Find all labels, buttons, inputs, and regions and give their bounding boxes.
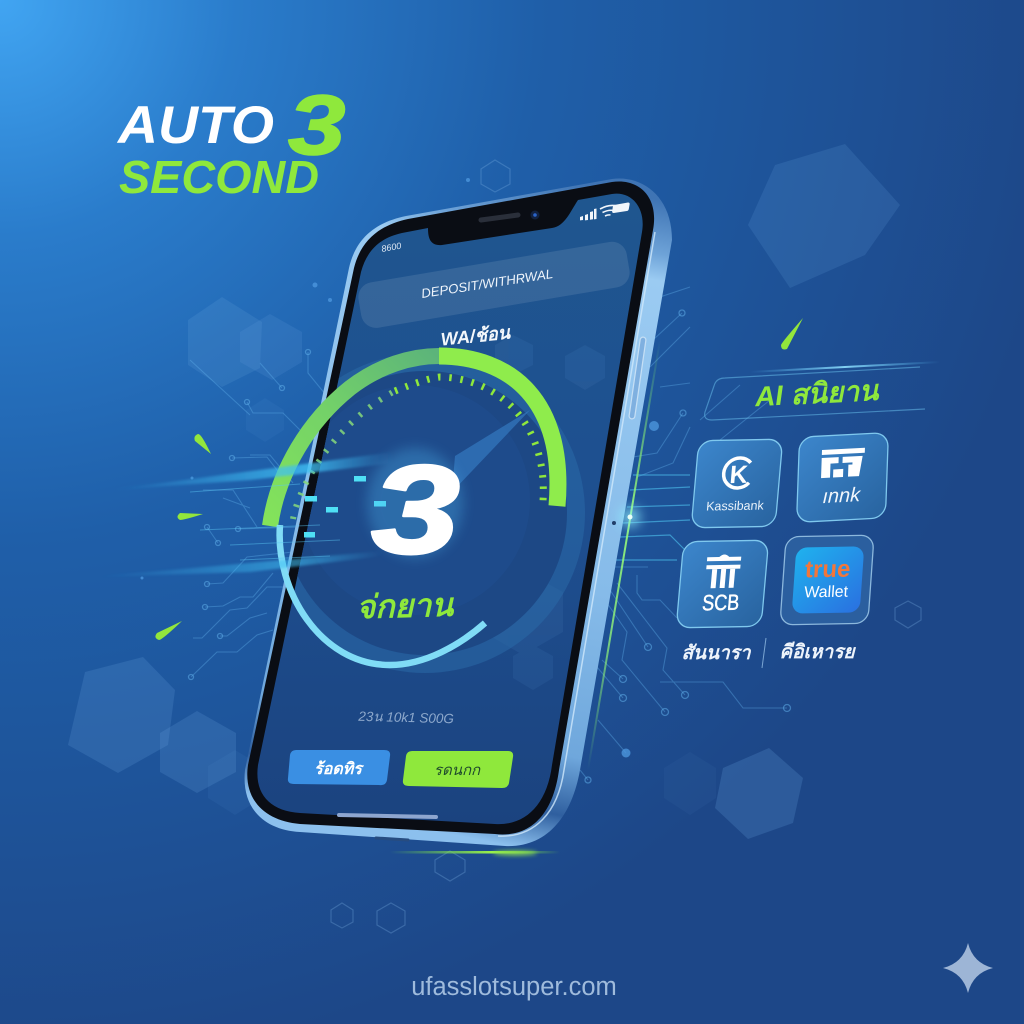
sparkle icon [943, 943, 993, 993]
side button [632, 340, 643, 416]
bank captions: สันนารา [681, 643, 752, 664]
bank tile: innk [797, 433, 888, 522]
AI label panel: AI สนิยาน [753, 375, 881, 412]
tick marks [395, 377, 543, 501]
bank tile: Kasikornbank [691, 439, 783, 528]
phone frame [245, 179, 672, 846]
logo temple [705, 554, 741, 588]
title: 3 [288, 78, 345, 172]
bank tile: innk: ınnk [822, 484, 862, 508]
home indicator [339, 815, 436, 817]
green sparks [155, 318, 803, 640]
deposit bar: DEPOSIT/WITHRWAL [420, 266, 554, 301]
phone [245, 179, 672, 846]
bank tile: Kasikornbank: Kassibank [706, 499, 765, 514]
title [116, 78, 345, 203]
bank tile: True Wallet: true [804, 556, 851, 583]
bank tile: SCB: SCB [701, 590, 740, 615]
green button [403, 751, 513, 788]
cyan arc [280, 525, 485, 665]
green arc dim [270, 356, 439, 526]
title: SECOND [119, 151, 319, 203]
big number: 3 [371, 439, 460, 580]
AI label panel [705, 361, 940, 420]
number glow [367, 448, 463, 558]
blue button: ร้อดทิร [314, 760, 364, 778]
bank captions: คีอิเหารย [779, 641, 856, 663]
green button: รดนกก [434, 762, 481, 779]
speed gauge [93, 353, 585, 673]
gauge disc [265, 353, 585, 673]
status icons [580, 202, 630, 220]
speaker and camera [481, 210, 540, 220]
gauge label: จ่กยาน [356, 587, 455, 625]
frame highlight strip [498, 232, 655, 836]
logo blocks [821, 448, 865, 478]
logo K: K [728, 461, 749, 489]
side dot [612, 521, 616, 525]
screen [257, 194, 643, 824]
green side light [588, 340, 660, 770]
timing note: 23น 10k1 S00G [357, 709, 454, 726]
bank tile: True Wallet [780, 535, 874, 625]
bank captions [681, 638, 856, 668]
bezel [247, 181, 654, 834]
gauge heading: WA/ช้อน [440, 322, 513, 350]
blue button [288, 750, 390, 785]
deposit bar [356, 239, 632, 330]
decorative hexagons [68, 144, 921, 933]
bank tile: SCB [676, 540, 769, 628]
circuit lines [190, 287, 787, 780]
phone lower screen [288, 709, 513, 817]
bank tile: True Wallet: Wallet [804, 583, 849, 601]
green arc [439, 356, 558, 506]
status time: 8600 [381, 241, 402, 254]
screen hexagons [305, 335, 605, 690]
speed streaks [93, 452, 393, 577]
title: AUTO [116, 96, 274, 155]
glow accents [390, 507, 640, 856]
needle light [452, 410, 530, 492]
footer url: ufasslotsuper.com [411, 973, 617, 1001]
bottom port [376, 838, 408, 840]
